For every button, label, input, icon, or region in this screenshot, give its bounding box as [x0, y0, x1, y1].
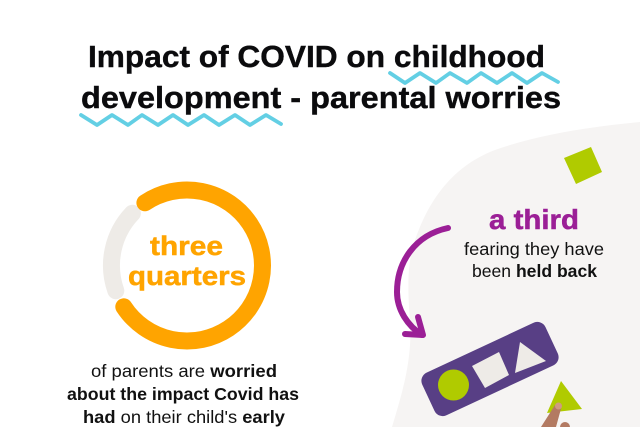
- toy circle: [438, 370, 469, 400]
- ring label: [128, 231, 246, 291]
- ring orange segment: [124, 190, 262, 341]
- description: a third: [464, 239, 604, 281]
- description: a third: been held back: [472, 261, 597, 281]
- description: three quarters: had on their child's early: [83, 407, 285, 427]
- description: a third: fearing they have: [464, 239, 604, 259]
- shape sorter toy: [418, 319, 562, 419]
- description: three quarters: of parents are worried: [91, 361, 277, 381]
- second finger: [560, 422, 570, 427]
- description: three quarters: about the impact Covid has: [67, 384, 299, 404]
- toy board: [418, 319, 562, 419]
- icon: child's hand: [541, 402, 570, 427]
- icon: green diamond: [564, 147, 602, 184]
- finger: [541, 405, 562, 427]
- title: Impact of COVID on childhood: [88, 39, 545, 74]
- ring chart: three quarters: [111, 190, 262, 341]
- ring remainder segment: [111, 213, 132, 291]
- fingertip: [555, 402, 562, 410]
- icon: green triangle: [547, 381, 582, 413]
- title: [81, 39, 561, 115]
- arrow: curved purple: [397, 228, 448, 335]
- wavy underline: development: [81, 115, 281, 125]
- description: three quarters: [67, 361, 299, 427]
- background blob panel: [392, 122, 640, 427]
- heading: a third: a third: [489, 204, 579, 235]
- title: development - parental worries: [81, 80, 561, 115]
- wavy underline: childhood: [390, 73, 558, 83]
- toy square: [472, 352, 509, 388]
- toy triangle: [515, 342, 546, 373]
- ring label: quarters: [128, 261, 246, 291]
- ring label: three: [150, 231, 223, 261]
